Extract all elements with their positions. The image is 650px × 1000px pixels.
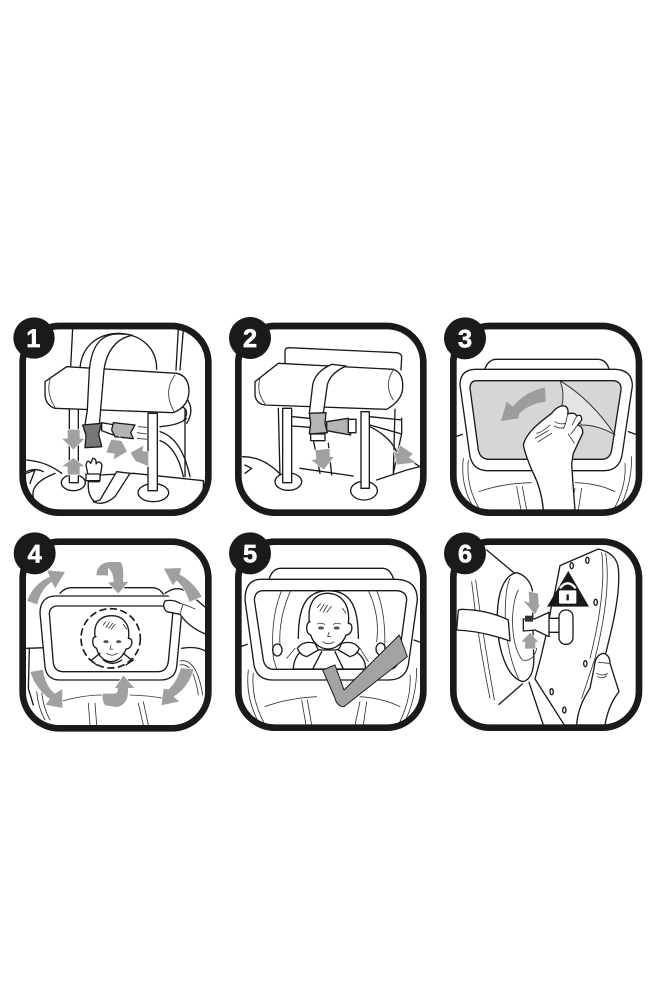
number badge 5: 5 [243, 540, 257, 568]
squeeze arrows [522, 591, 543, 615]
peeled film [560, 381, 615, 435]
strap [85, 334, 132, 425]
illustration: strap and buckle around headrest posts [23, 328, 203, 510]
arrows [61, 429, 85, 450]
curved arrow [501, 387, 546, 421]
mirror [40, 596, 182, 680]
baby face [89, 616, 133, 665]
number badge 3 [444, 317, 486, 359]
check mark [323, 635, 407, 707]
number badge 6: 6 [458, 540, 472, 568]
headrest [255, 363, 403, 409]
rounded frame [23, 542, 208, 728]
mirror [460, 369, 632, 471]
number badge 4 [14, 532, 56, 574]
strap [457, 609, 510, 641]
buckles [83, 423, 102, 448]
illustration: hand peeling film from mirror [456, 359, 636, 510]
panel: step 1 attach strap [13, 317, 208, 513]
car seat reflection [273, 591, 385, 669]
mirror back plate [535, 549, 619, 725]
arrows [311, 448, 334, 470]
number badge 1 [13, 317, 55, 359]
arrows [27, 562, 202, 708]
buckle [327, 418, 351, 435]
rounded frame [453, 542, 639, 728]
rounded frame [238, 326, 423, 513]
rounded frame [238, 542, 423, 728]
rounded frame [23, 326, 208, 513]
number badge 2: 2 [243, 325, 257, 353]
instruction steps grid [13, 317, 642, 732]
illustration: baby reflected in mirror with check mark [241, 568, 421, 725]
panel: step 6 lock mirror ball joint [444, 532, 639, 728]
number badge 5 [229, 532, 271, 574]
number badge 4: 4 [28, 540, 42, 568]
hand [577, 653, 619, 725]
number badge 1: 1 [26, 325, 40, 353]
mirror [245, 579, 417, 680]
round mount [497, 573, 534, 682]
dashed circle [81, 609, 140, 668]
number badge 3: 3 [458, 325, 472, 353]
panel: step 5 baby visible in mirror [229, 532, 423, 728]
knob and connector [550, 618, 558, 633]
baby [293, 593, 365, 669]
hand [164, 589, 207, 634]
headrest [45, 367, 189, 413]
lock warning triangle [547, 571, 589, 607]
rounded frame [453, 326, 639, 513]
screws [550, 557, 597, 713]
panel: step 4 adjust mirror angle [14, 532, 208, 728]
hand [523, 406, 583, 510]
number badge 6 [444, 532, 486, 574]
number badge 2 [229, 317, 271, 359]
illustration: mirror back locking to mount [457, 549, 619, 725]
strap over headrest [309, 364, 346, 413]
illustration: fastened buckle and strap [243, 348, 420, 500]
panel: step 3 peel film [444, 317, 639, 513]
panel: step 2 tighten strap [229, 317, 423, 513]
illustration: mirror with baby face and rotation arrows [27, 562, 207, 725]
